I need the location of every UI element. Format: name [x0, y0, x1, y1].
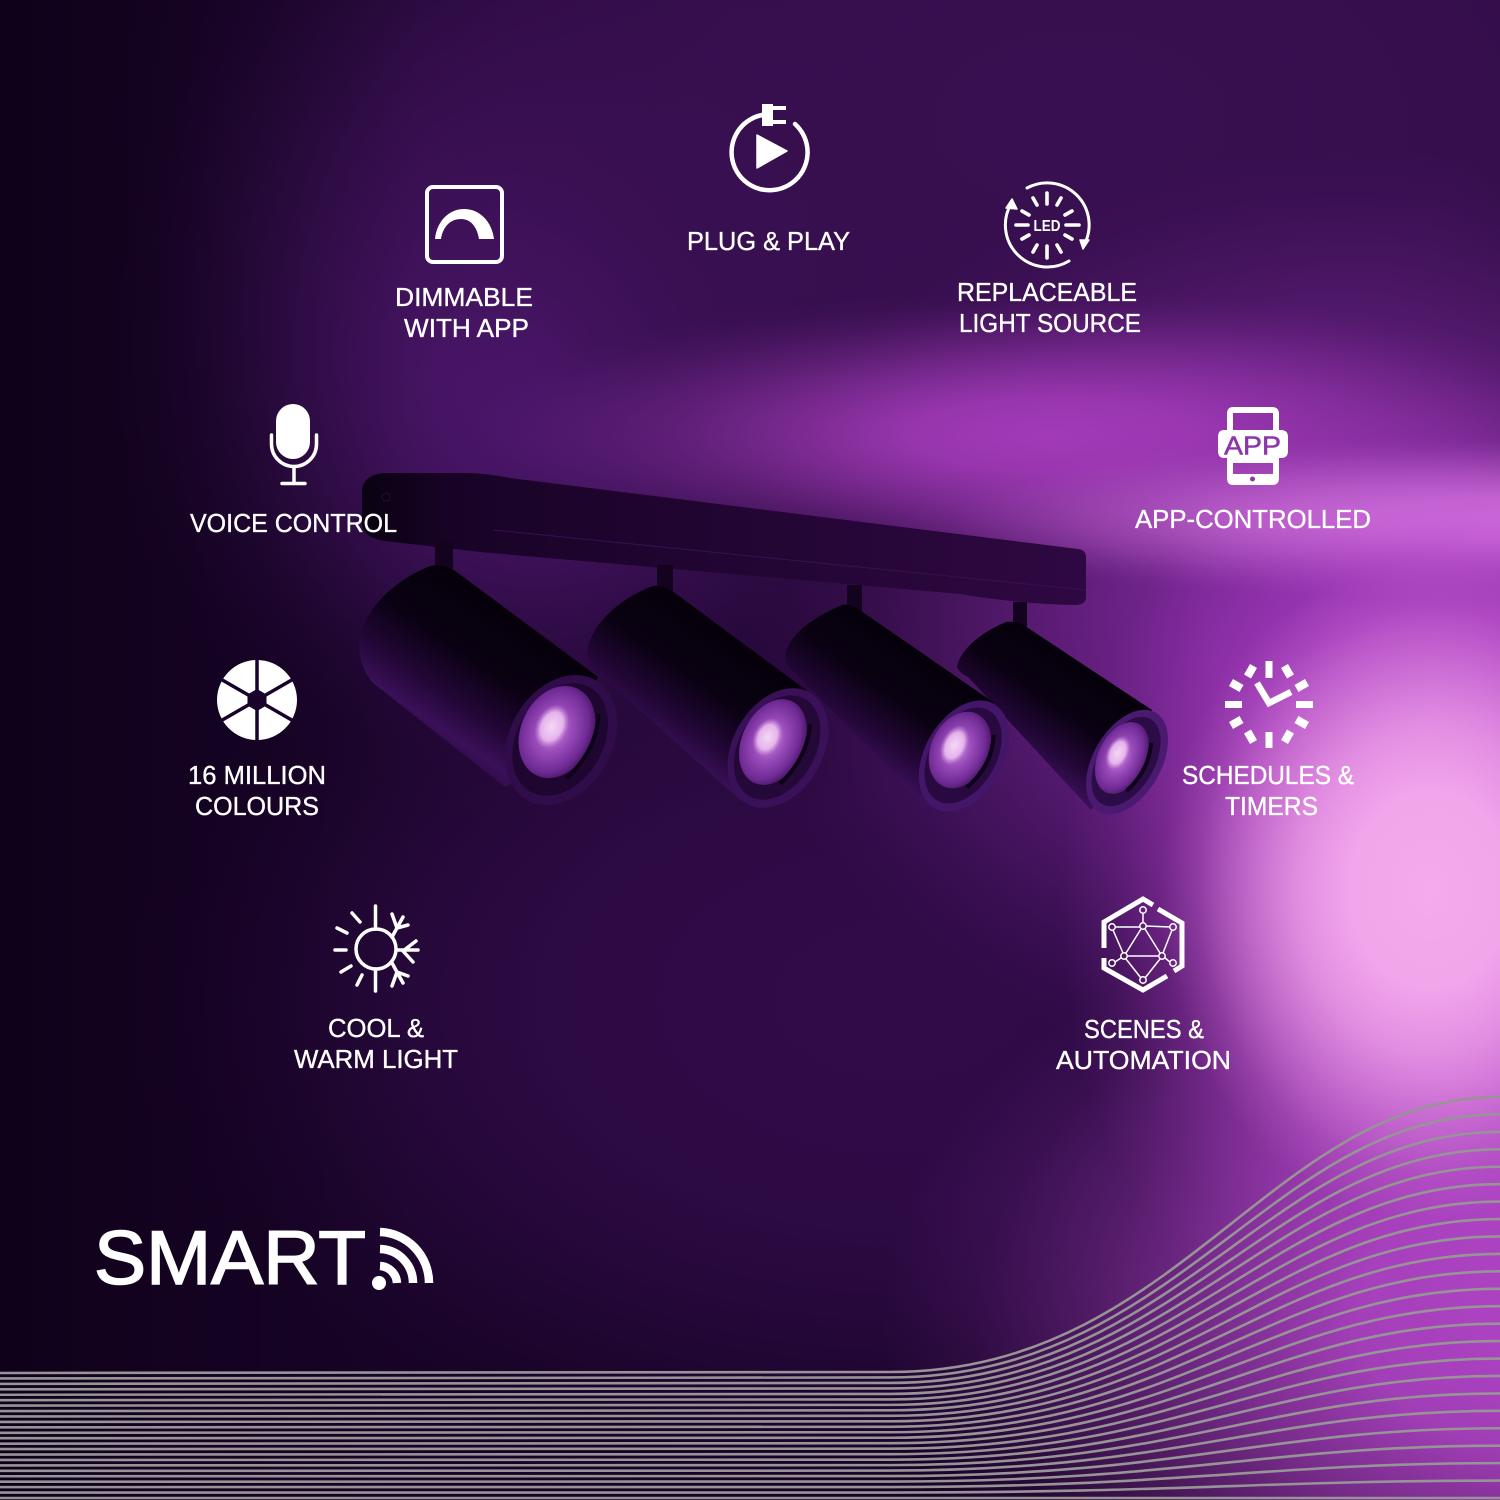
icon: LED refresh	[1005, 183, 1089, 267]
label: dimmable with app: DIMMABLE	[395, 282, 533, 312]
icon: sun and snowflake	[335, 906, 418, 991]
logo: SMART wifi: SMART	[94, 1216, 366, 1301]
icon: colour wheel	[217, 658, 297, 742]
label: schedules and timers: SCHEDULES &	[1182, 760, 1354, 790]
feature: replaceable light source	[957, 183, 1141, 338]
label: replaceable light source: REPLACEABLE	[957, 277, 1137, 307]
label: 16 million colours: 16 MILLION	[188, 760, 326, 790]
label: 16 million colours: COLOURS	[195, 791, 319, 821]
label: voice control: VOICE CONTROL	[190, 508, 397, 538]
label: cool and warm light: COOL &	[328, 1013, 424, 1043]
feature: 16 million colours	[188, 658, 326, 821]
label: plug and play: PLUG & PLAY	[687, 226, 850, 256]
feature: plug and play	[687, 104, 850, 256]
lamp 2	[587, 565, 849, 826]
feature: dimmable with app	[395, 187, 533, 343]
label: cool and warm light: WARM LIGHT	[294, 1044, 458, 1074]
icon: clock	[1225, 661, 1313, 748]
icon: app tablet	[1218, 407, 1288, 485]
icon: app tablet: APP	[1224, 430, 1281, 460]
label: app-controlled: APP-CONTROLLED	[1135, 504, 1371, 534]
ceiling bar	[362, 473, 1086, 605]
icon: wifi	[372, 1232, 429, 1290]
label: dimmable with app	[395, 282, 533, 343]
lamp 1	[359, 541, 640, 825]
wave line pattern	[0, 1097, 1500, 1498]
icon: LED refresh: LED	[1034, 218, 1060, 235]
icon: plug and play	[732, 104, 808, 190]
icon: network hexagon	[1104, 899, 1182, 990]
feature: voice control	[190, 404, 397, 538]
label: 16 million colours	[188, 760, 326, 821]
icon: dimmer	[427, 187, 502, 262]
feature: scenes and automation	[1056, 899, 1231, 1075]
label: replaceable light source: LIGHT SOURCE	[959, 308, 1141, 338]
icon: microphone	[272, 404, 316, 484]
label: scenes and automation: AUTOMATION	[1056, 1045, 1231, 1075]
feature: cool and warm light	[294, 906, 458, 1074]
label: dimmable with app: WITH APP	[404, 313, 529, 343]
label: cool and warm light	[294, 1013, 458, 1074]
label: scenes and automation: SCENES &	[1084, 1014, 1204, 1044]
label: schedules and timers	[1182, 760, 1354, 821]
spotlight fixture	[359, 473, 1185, 828]
feature: schedules and timers	[1182, 661, 1354, 821]
feature: app-controlled	[1135, 407, 1371, 534]
lamp 4	[957, 602, 1185, 828]
label: scenes and automation	[1056, 1014, 1231, 1075]
label: schedules and timers: TIMERS	[1225, 791, 1318, 821]
lamp 3	[785, 585, 1028, 827]
label: replaceable light source	[957, 277, 1141, 338]
